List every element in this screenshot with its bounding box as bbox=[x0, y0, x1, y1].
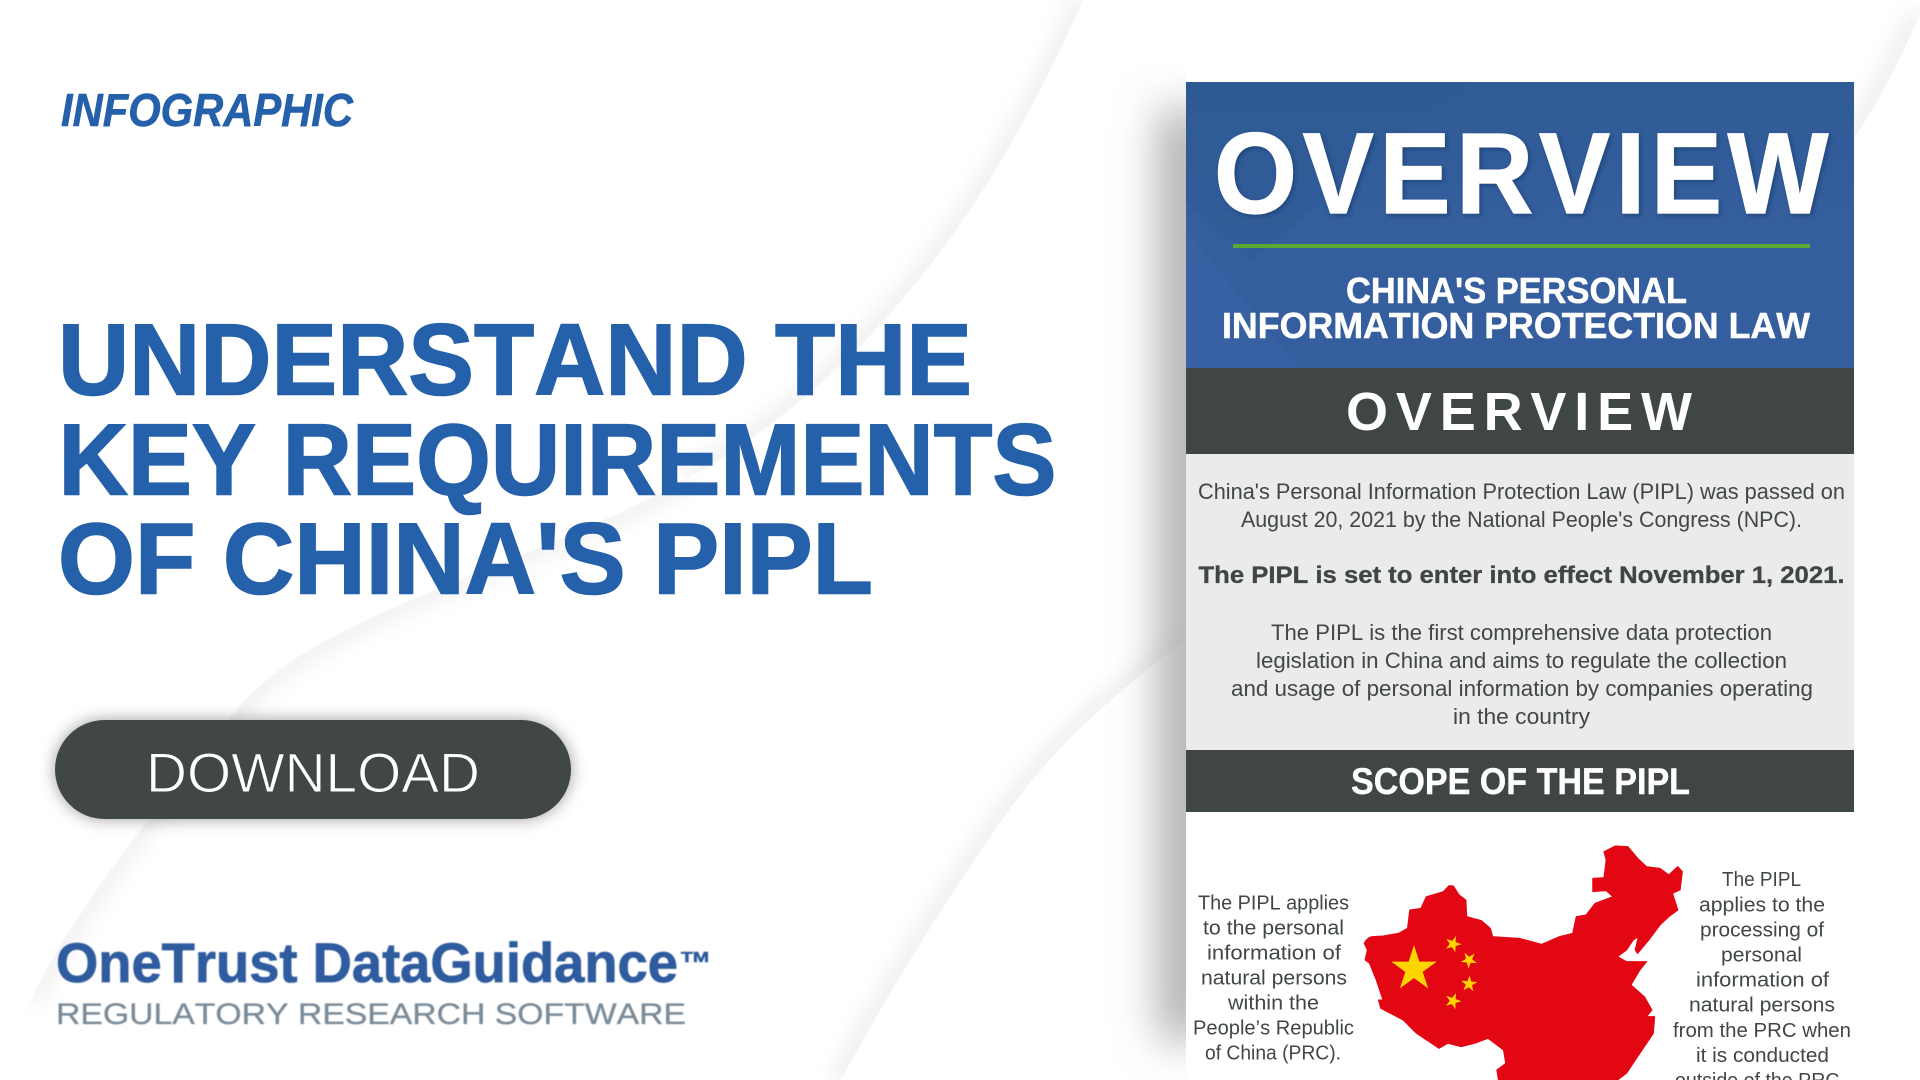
download button bbox=[55, 720, 571, 819]
text block: right scope description: it is conducted bbox=[1696, 1045, 1829, 1067]
subtitle bbox=[1222, 270, 1810, 346]
panel: infographic preview bbox=[1186, 82, 1854, 1080]
heading: overview: OVERVIEW bbox=[1214, 110, 1834, 238]
text block: overview description: The PIPL is the first comprehensive data protection bbox=[1271, 620, 1772, 645]
text block: right scope description: The PIPL bbox=[1722, 869, 1801, 891]
text block: left scope description: of China (PRC). bbox=[1205, 1042, 1341, 1064]
text block: left scope description: to the personal bbox=[1203, 918, 1344, 940]
subtitle: INFORMATION PROTECTION LAW bbox=[1222, 305, 1810, 346]
text block: overview description: China's Personal Information Protection Law (PIPL) was passed on bbox=[1198, 479, 1845, 504]
subtitle: CHINA'S PERSONAL bbox=[1346, 270, 1687, 311]
main title: KEY REQUIREMENTS bbox=[58, 404, 1056, 516]
text block: right scope description: natural persons bbox=[1689, 994, 1835, 1016]
text block: left scope description: natural persons bbox=[1201, 968, 1347, 990]
icon: China map with flag stars bbox=[1364, 846, 1682, 1080]
text block: right scope description: information of bbox=[1696, 970, 1829, 992]
text block: left scope description bbox=[1193, 892, 1354, 1064]
section bar: overview bbox=[1186, 368, 1854, 454]
text block: right scope description: processing of bbox=[1700, 920, 1824, 942]
main title: UNDERSTAND THE bbox=[58, 304, 972, 416]
text block: overview description: legislation in China and aims to regulate the collection bbox=[1256, 648, 1787, 673]
text block: right scope description: from the PRC when bbox=[1673, 1020, 1851, 1042]
main title: OF CHINA'S PIPL bbox=[58, 504, 873, 616]
section bar: scope of the PIPL bbox=[1186, 750, 1854, 812]
logo: OneTrust DataGuidance bbox=[56, 931, 709, 1031]
green divider bbox=[1233, 244, 1810, 248]
text block: overview description: and usage of personal information by companies operating bbox=[1231, 676, 1813, 701]
label: infographic: INFOGRAPHIC bbox=[61, 84, 354, 136]
text block: overview description: August 20, 2021 by the National People's Congress (NPC). bbox=[1241, 507, 1802, 532]
text block: left scope description: information of bbox=[1207, 942, 1341, 964]
section bar: scope of the PIPL: SCOPE OF THE PIPL bbox=[1351, 761, 1690, 802]
panel header: blue banner bbox=[1186, 82, 1854, 369]
text block: right scope description: personal bbox=[1721, 944, 1802, 966]
logo: OneTrust DataGuidance: REGULATORY RESEARCH SOFTWARE bbox=[56, 998, 686, 1031]
main title bbox=[58, 304, 1056, 616]
text block: overview description: in the country bbox=[1453, 704, 1590, 729]
text block: left scope description: People’s Republic bbox=[1193, 1018, 1354, 1040]
logo: OneTrust DataGuidance: TM bbox=[681, 949, 709, 966]
panel shadow bbox=[1160, 110, 1210, 1040]
text block: right scope description bbox=[1673, 869, 1851, 1080]
text block: left scope description: within the bbox=[1227, 992, 1319, 1014]
text block: left scope description: The PIPL applies bbox=[1198, 892, 1349, 914]
download button: DOWNLOAD bbox=[146, 741, 480, 804]
text block: right scope description: applies to the bbox=[1699, 894, 1825, 916]
text block: overview description: The PIPL is set to enter into effect November 1, 2021. bbox=[1198, 562, 1844, 589]
text block: overview description bbox=[1186, 454, 1854, 750]
section bar: overview: OVERVIEW bbox=[1346, 382, 1692, 442]
logo: OneTrust DataGuidance: OneTrust DataGuidance bbox=[56, 931, 678, 994]
